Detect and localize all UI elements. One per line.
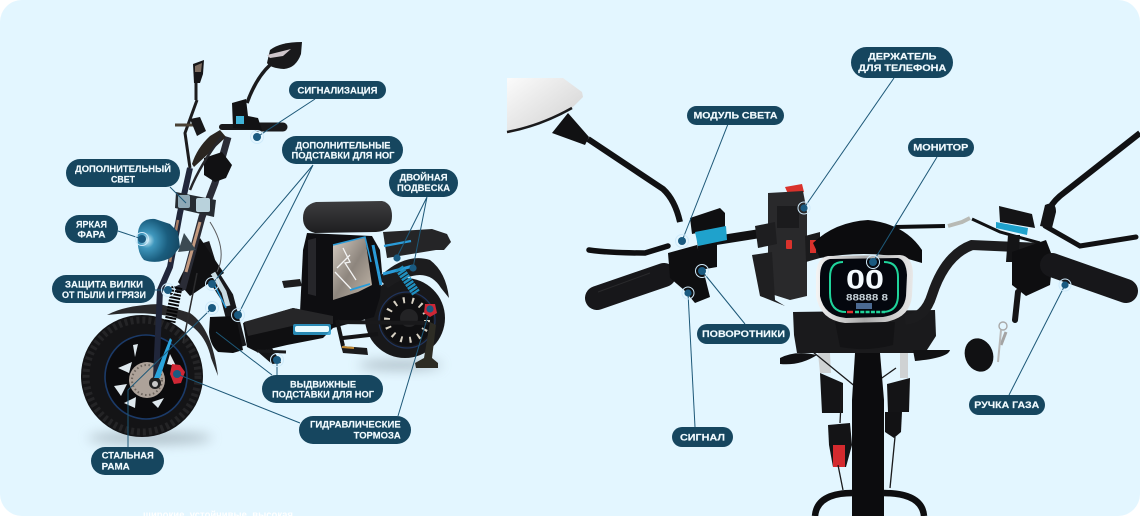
monitor [816, 255, 913, 323]
rear wheel [365, 278, 445, 358]
front fender [107, 304, 218, 376]
front fork tubes [154, 137, 228, 378]
right mirror stem [1050, 133, 1140, 208]
headlight [138, 219, 196, 262]
callout: дополнительный свет: ДОПОЛНИТЕЛЬНЫЙ [75, 163, 171, 174]
rear fender and rack [378, 229, 451, 298]
callout: сигнал [672, 287, 733, 447]
callout: дополнительные подставки для ног: ДОПОЛНИТЕЛЬНЫЕ [296, 139, 390, 150]
seat [303, 201, 392, 233]
brake reservoir [690, 208, 727, 270]
callout: ручка газа: РУЧКА ГАЗА [974, 399, 1040, 410]
cables [813, 352, 896, 490]
callout: сигнал: СИГНАЛ [680, 432, 725, 442]
callout: сигнализация [250, 81, 386, 144]
callout: защита вилки: ЗАЩИТА ВИЛКИ [65, 279, 143, 290]
lower right leg [885, 412, 902, 438]
callout: дополнительный свет [66, 159, 186, 203]
lower instrument box [835, 322, 895, 349]
callout: гидравлические тормоза: ГИДРАВЛИЧЕСКИЕ [310, 419, 401, 430]
callout: двойная подвеска: ПОДВЕСКА [397, 182, 450, 193]
handlebar [175, 99, 283, 136]
callout: модуль света [676, 106, 784, 248]
callout: стальная рама [91, 302, 218, 475]
basket [793, 310, 936, 353]
footboard and lower body [243, 308, 333, 352]
left mirror [193, 60, 204, 100]
monitor: 88888 8 [846, 292, 888, 302]
callout: поворотники [696, 264, 790, 344]
callout: держатель для телефона [798, 47, 953, 214]
right grip [1052, 265, 1126, 291]
callout: яркая фара: ЯРКАЯ [76, 218, 107, 229]
front wheel [81, 315, 203, 437]
foot pegs [780, 350, 950, 364]
kickstand [415, 322, 438, 368]
callout: защита вилки: ОТ ПЫЛИ И ГРЯЗИ [62, 289, 146, 300]
panel: scooter side view [52, 42, 458, 475]
left brake block [828, 423, 852, 467]
callout: выдвижные подставки для ног: ПОДСТАВКИ ДЛЯ НОГ [272, 388, 375, 399]
brake hose [895, 218, 1040, 243]
handlebar head [185, 100, 232, 190]
left switch housing [668, 245, 710, 303]
callout: модуль света: МОДУЛЬ СВЕТА [694, 110, 778, 121]
phone holder [752, 184, 820, 306]
right bar [905, 245, 1040, 320]
left mirror large [507, 78, 680, 222]
brake disc [129, 362, 165, 398]
light bar [293, 324, 331, 335]
callout: держатель для телефона: ДЛЯ ТЕЛЕФОНА [858, 62, 947, 73]
callout: стальная рама: СТАЛЬНАЯ [102, 450, 154, 461]
callout: сигнализация: СИГНАЛИЗАЦИЯ [298, 84, 378, 96]
callout: монитор [866, 138, 974, 268]
right mirror [247, 42, 302, 103]
callout: держатель для телефона: ДЕРЖАТЕЛЬ [868, 50, 937, 62]
callout: гидравлические тормоза: ТОРМОЗА [354, 429, 401, 440]
footrest pair near seat [282, 279, 302, 288]
callout: монитор: МОНИТОР [913, 142, 968, 152]
callout: поворотники: ПОВОРОТНИКИ [702, 328, 785, 339]
panel: handlebar view [507, 47, 1140, 516]
fork and center stem [780, 350, 950, 516]
right lever [1045, 226, 1136, 246]
left bar [700, 232, 770, 243]
fork boots [820, 373, 910, 413]
left lever [589, 246, 668, 253]
extra lights [175, 192, 216, 217]
rear frame arms and pedal [337, 320, 428, 355]
seat box [300, 233, 382, 328]
callout: ручка газа [969, 279, 1071, 415]
right switch housing [1012, 240, 1053, 296]
front frame [178, 238, 243, 353]
callout: дополнительные подставки для ног [206, 136, 403, 322]
monitor: 00 [846, 264, 884, 294]
callout: гидравлические тормоза [173, 304, 437, 444]
right reservoir [996, 204, 1056, 262]
bottom arcs [815, 493, 924, 516]
callout: двойная подвеска [389, 169, 458, 272]
callout: выдвижные подставки для ног: ВЫДВИЖНЫЕ [290, 378, 356, 389]
center stem [852, 353, 884, 516]
left grip [597, 273, 664, 298]
pull-out footrest [257, 348, 286, 364]
callout: двойная подвеска: ДВОЙНАЯ [400, 172, 448, 183]
callout: стальная рама: РАМА [102, 460, 130, 471]
brake caliper [152, 364, 185, 387]
cable [210, 222, 221, 272]
rear suspension spring [399, 268, 416, 293]
callout: яркая фара: ФАРА [78, 229, 106, 240]
hood [813, 220, 922, 263]
callout: защита вилки [52, 275, 174, 303]
callout: яркая фара [65, 215, 148, 246]
callout: дополнительные подставки для ног: ПОДСТАВКИ ДЛЯ НОГ [292, 150, 395, 161]
fork upper tubes [818, 353, 908, 378]
ignition keys [960, 292, 1018, 376]
ground shadows [88, 361, 442, 444]
callout: дополнительный свет: СВЕТ [111, 173, 135, 184]
callout: выдвижные подставки для ног [216, 332, 383, 403]
